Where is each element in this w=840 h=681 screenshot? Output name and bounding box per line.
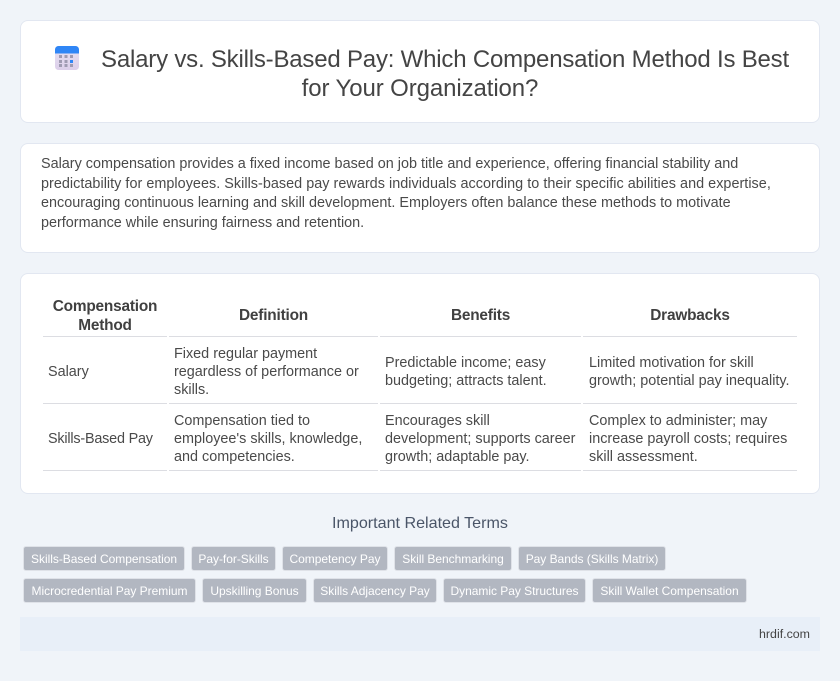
tag: Pay-for-Skills <box>198 552 269 566</box>
header card <box>20 20 820 123</box>
intro paragraph <box>41 156 771 230</box>
tag: Microcredential Pay Premium <box>32 584 187 598</box>
row: skills-based pay: increase payroll costs; requires <box>589 431 787 447</box>
row: salary: Predictable income; easy <box>385 355 546 371</box>
column headers: Benefits <box>451 307 510 324</box>
row: skills-based pay: employee's skills, knowledge, <box>174 431 362 447</box>
tag: Skill Benchmarking <box>402 552 504 566</box>
tag: Pay Bands (Skills Matrix) <box>526 552 658 566</box>
footer bar <box>20 617 820 651</box>
icon: calendar <box>55 46 79 70</box>
title <box>101 46 789 102</box>
column headers: Method <box>78 317 132 334</box>
tag: Competency Pay <box>290 552 380 566</box>
column headers: Definition <box>239 307 308 324</box>
row: salary: Fixed regular payment <box>174 346 317 362</box>
row: salary: skills. <box>174 382 209 398</box>
intro paragraph: encouraging continuous learning and skill development. Employers often balance these methods to motivate <box>41 195 731 211</box>
row: skills-based pay: Complex to administer; may <box>589 413 767 429</box>
row: salary: regardless of performance or <box>174 364 359 380</box>
tag: Skills-Based Compensation <box>31 552 177 566</box>
tag: Skills Adjacency Pay <box>320 584 430 598</box>
column headers <box>53 298 730 334</box>
row: salary: budgeting; attracts talent. <box>385 373 547 389</box>
comparison table card <box>20 273 820 494</box>
row: skills-based pay: Skills-Based Pay <box>48 431 153 447</box>
tag: Dynamic Pay Structures <box>450 584 579 598</box>
row: skills-based pay: development; supports career <box>385 431 575 447</box>
tag <box>191 546 276 571</box>
related terms heading: Important Related Terms <box>332 514 508 532</box>
tag: Skill Wallet Compensation <box>600 584 739 598</box>
tag <box>518 546 666 571</box>
tag <box>394 546 512 571</box>
intro text card <box>20 143 820 253</box>
tag <box>313 578 437 603</box>
column headers: Drawbacks <box>650 307 730 324</box>
row: salary: Salary <box>48 364 89 380</box>
tag <box>592 578 747 603</box>
row: skills-based pay: Compensation tied to <box>174 413 310 429</box>
title: Salary vs. Skills-Based Pay: Which Compensation Method Is Best <box>101 46 789 73</box>
intro paragraph: predictability for employees. Skills-based pay rewards individuals according to their specific abilities and expertise, <box>41 176 771 192</box>
tag <box>443 578 586 603</box>
intro paragraph: performance while ensuring fairness and retention. <box>41 214 364 230</box>
tag <box>23 546 185 571</box>
tag: Upskilling Bonus <box>210 584 299 598</box>
row: salary <box>48 346 790 398</box>
tag <box>202 578 307 603</box>
row: salary: Limited motivation for skill <box>589 355 754 371</box>
row: salary: growth; potential pay inequality. <box>589 373 790 389</box>
row: skills-based pay <box>48 413 787 465</box>
row: skills-based pay: skill assessment. <box>589 449 698 465</box>
row: skills-based pay: Encourages skill <box>385 413 490 429</box>
tag <box>282 546 388 571</box>
footer source: hrdif.com <box>759 627 810 641</box>
row: skills-based pay: and competencies. <box>174 449 295 465</box>
column headers: Compensation <box>53 298 157 315</box>
row: skills-based pay: growth; adaptable pay. <box>385 449 530 465</box>
related terms tags <box>23 546 747 603</box>
tag <box>23 578 196 603</box>
title: for Your Organization? <box>302 75 538 102</box>
intro paragraph: Salary compensation provides a fixed income based on job title and experience, offering financial stability and <box>41 156 738 172</box>
